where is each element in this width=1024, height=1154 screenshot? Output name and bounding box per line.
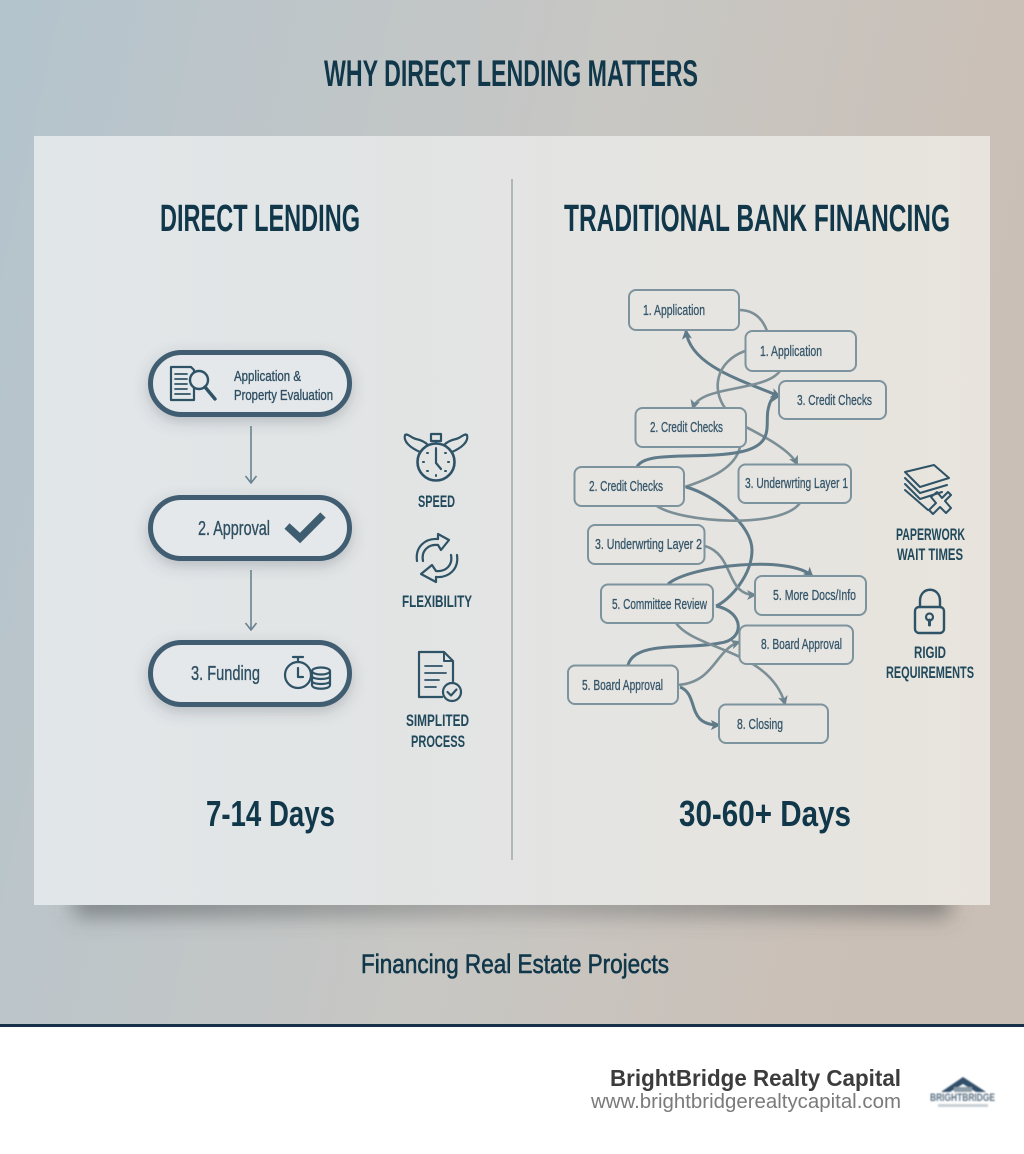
box: application: 1. Application <box>643 302 705 319</box>
benefit: simplified process <box>406 652 469 751</box>
box: closing <box>719 704 828 743</box>
icon: winged stopwatch <box>405 434 467 480</box>
box: more docs: 5. More Docs/Info <box>773 587 856 604</box>
timeline: 30-60+ days: 30-60+ Days <box>679 793 851 834</box>
step 3 pill <box>150 642 350 704</box>
box: underwriting layer 2: 3. Underwrting Layer 2 <box>595 536 702 553</box>
box: board approval 5 <box>568 666 678 704</box>
timeline: 7-14 days: 7-14 Days <box>206 793 335 834</box>
box: credit checks 2b <box>574 467 684 506</box>
icon: check mark <box>287 515 323 538</box>
icon: refresh arrows <box>417 534 457 582</box>
divider <box>511 179 513 860</box>
brand name: BrightBridge Realty Capital <box>610 1065 901 1091</box>
process boxes <box>568 290 886 743</box>
box: credit checks 2a: 2. Credit Checks <box>650 419 723 436</box>
icon: stopwatch and coins <box>285 657 330 689</box>
box: board approval 8: 8. Board Approval <box>761 636 842 653</box>
drawback: paperwork wait times <box>896 465 965 564</box>
title: WHY DIRECT LENDING MATTERS <box>324 53 698 94</box>
box: credit checks 3 <box>779 381 886 419</box>
logo: BRIGHTBRIDGE <box>930 1092 995 1104</box>
label: speed: SPEED <box>418 492 455 511</box>
arrow: step 1 to 2 <box>246 426 256 483</box>
icon: padlock <box>915 590 944 633</box>
box: application <box>629 290 739 330</box>
label: simplited process: PROCESS <box>411 732 465 751</box>
drawback: rigid requirements <box>886 590 974 682</box>
footer <box>0 1024 1024 1154</box>
panel: direct lending <box>150 198 472 834</box>
label: rigid requirements: REQUIREMENTS <box>886 663 974 682</box>
icon: document with magnifier <box>171 367 215 400</box>
box: credit checks 3: 3. Credit Checks <box>797 392 872 409</box>
box: closing: 8. Closing <box>737 716 783 733</box>
icon: document with check <box>419 652 461 701</box>
card shadow <box>74 890 950 916</box>
label: simplited process: SIMPLITED <box>406 711 469 730</box>
box: committee review: 5. Committee Review <box>612 596 707 613</box>
label: paperwork wait times: WAIT TIMES <box>897 545 963 564</box>
box: more docs <box>755 576 866 615</box>
box: application 2 <box>746 331 856 371</box>
arrow: step 2 to 3 <box>246 570 256 630</box>
label: rigid requirements: RIGID <box>914 643 946 662</box>
box: underwriting layer 2 <box>588 525 704 564</box>
icon: paper stack with x <box>905 465 951 514</box>
box: credit checks 2a <box>636 408 746 447</box>
box: board approval 8 <box>740 626 853 664</box>
logo <box>930 1077 995 1107</box>
benefit: flexibility <box>402 534 472 611</box>
tangled connectors <box>628 310 812 725</box>
panel: traditional bank financing <box>564 198 974 834</box>
step 1 label: Property Evaluation <box>234 387 333 404</box>
box: board approval 5: 5. Board Approval <box>582 677 663 694</box>
website: www.brightbridgerealtycapital.com <box>590 1091 901 1113</box>
box: underwriting layer 1 <box>738 464 851 503</box>
label: paperwork wait times: PAPERWORK <box>896 525 965 544</box>
caption: Financing Real Estate Projects <box>361 949 669 979</box>
box: credit checks 2b: 2. Credit Checks <box>589 478 663 495</box>
step 3 label: 3. Funding <box>191 663 260 685</box>
box: committee review <box>601 584 713 623</box>
box: underwriting layer 1: 3. Underwrting Layer 1 <box>745 475 848 492</box>
box: application 2: 1. Application <box>760 343 822 360</box>
comparison card <box>34 136 990 905</box>
step 1 label: Application & <box>234 368 301 385</box>
step 2 label: 2. Approval <box>198 518 270 540</box>
step 2 pill <box>150 498 350 558</box>
label: flexibility: FLEXIBILITY <box>402 592 472 611</box>
step 1 pill <box>150 352 350 414</box>
heading: direct lending: DIRECT LENDING <box>160 198 360 240</box>
benefit: speed <box>405 434 467 511</box>
